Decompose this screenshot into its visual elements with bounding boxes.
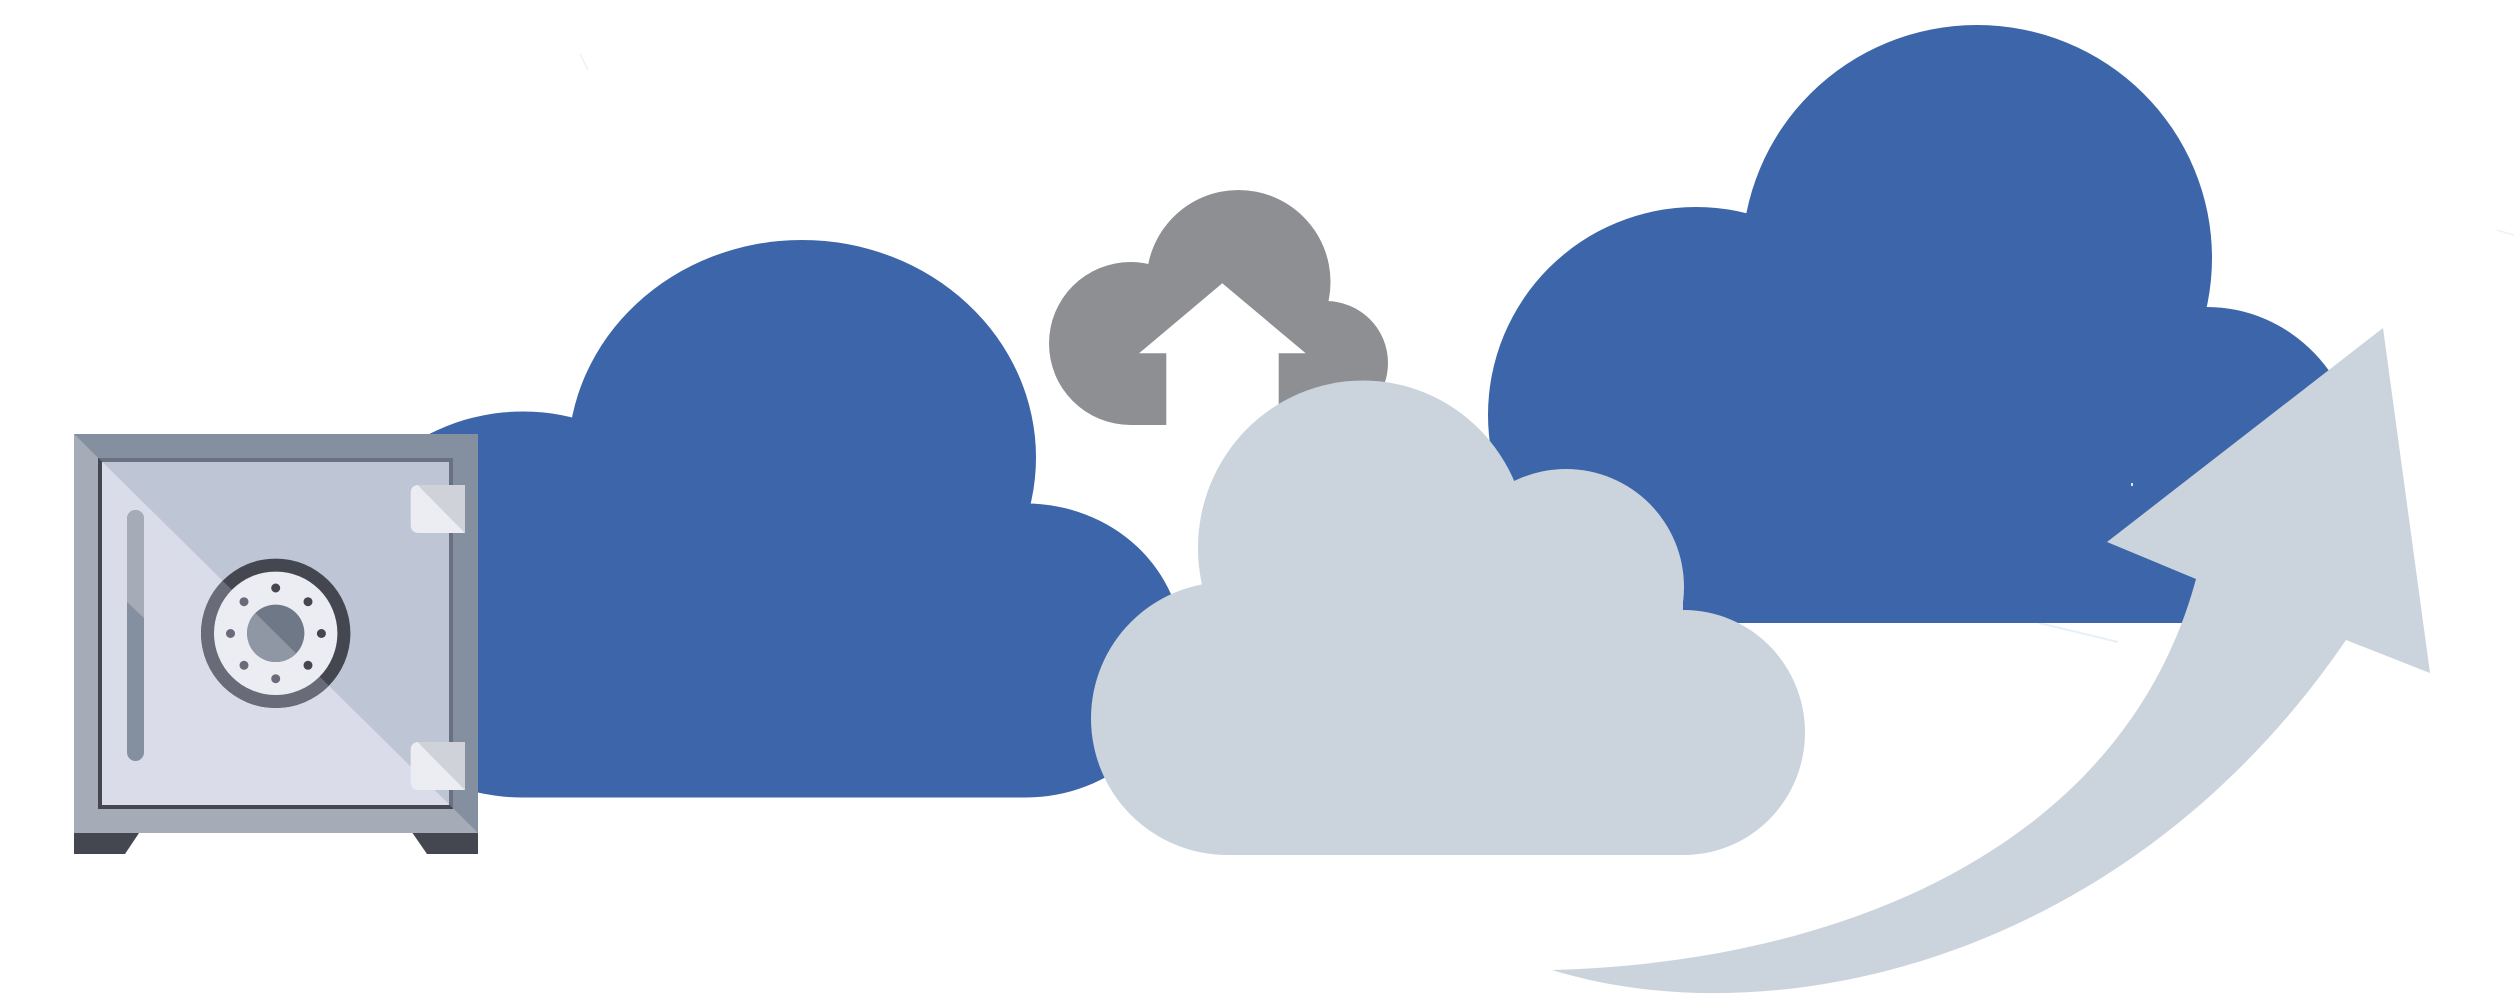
top hinge [411, 485, 465, 533]
dial [201, 559, 350, 708]
icon: large blue cloud right [1488, 25, 2359, 623]
icon: blue cloud centre [323, 240, 1183, 798]
bottom hinge [411, 742, 465, 790]
icon: pale cloud front [1091, 380, 1805, 855]
door handle [127, 510, 144, 761]
safe body [74, 434, 478, 833]
arrow: rising growth arrow [1552, 328, 2430, 993]
icon: grey cloud with upload arrow [1049, 190, 1388, 440]
safe feet [74, 833, 478, 854]
icon: safe [74, 434, 478, 854]
safe door [98, 458, 453, 809]
